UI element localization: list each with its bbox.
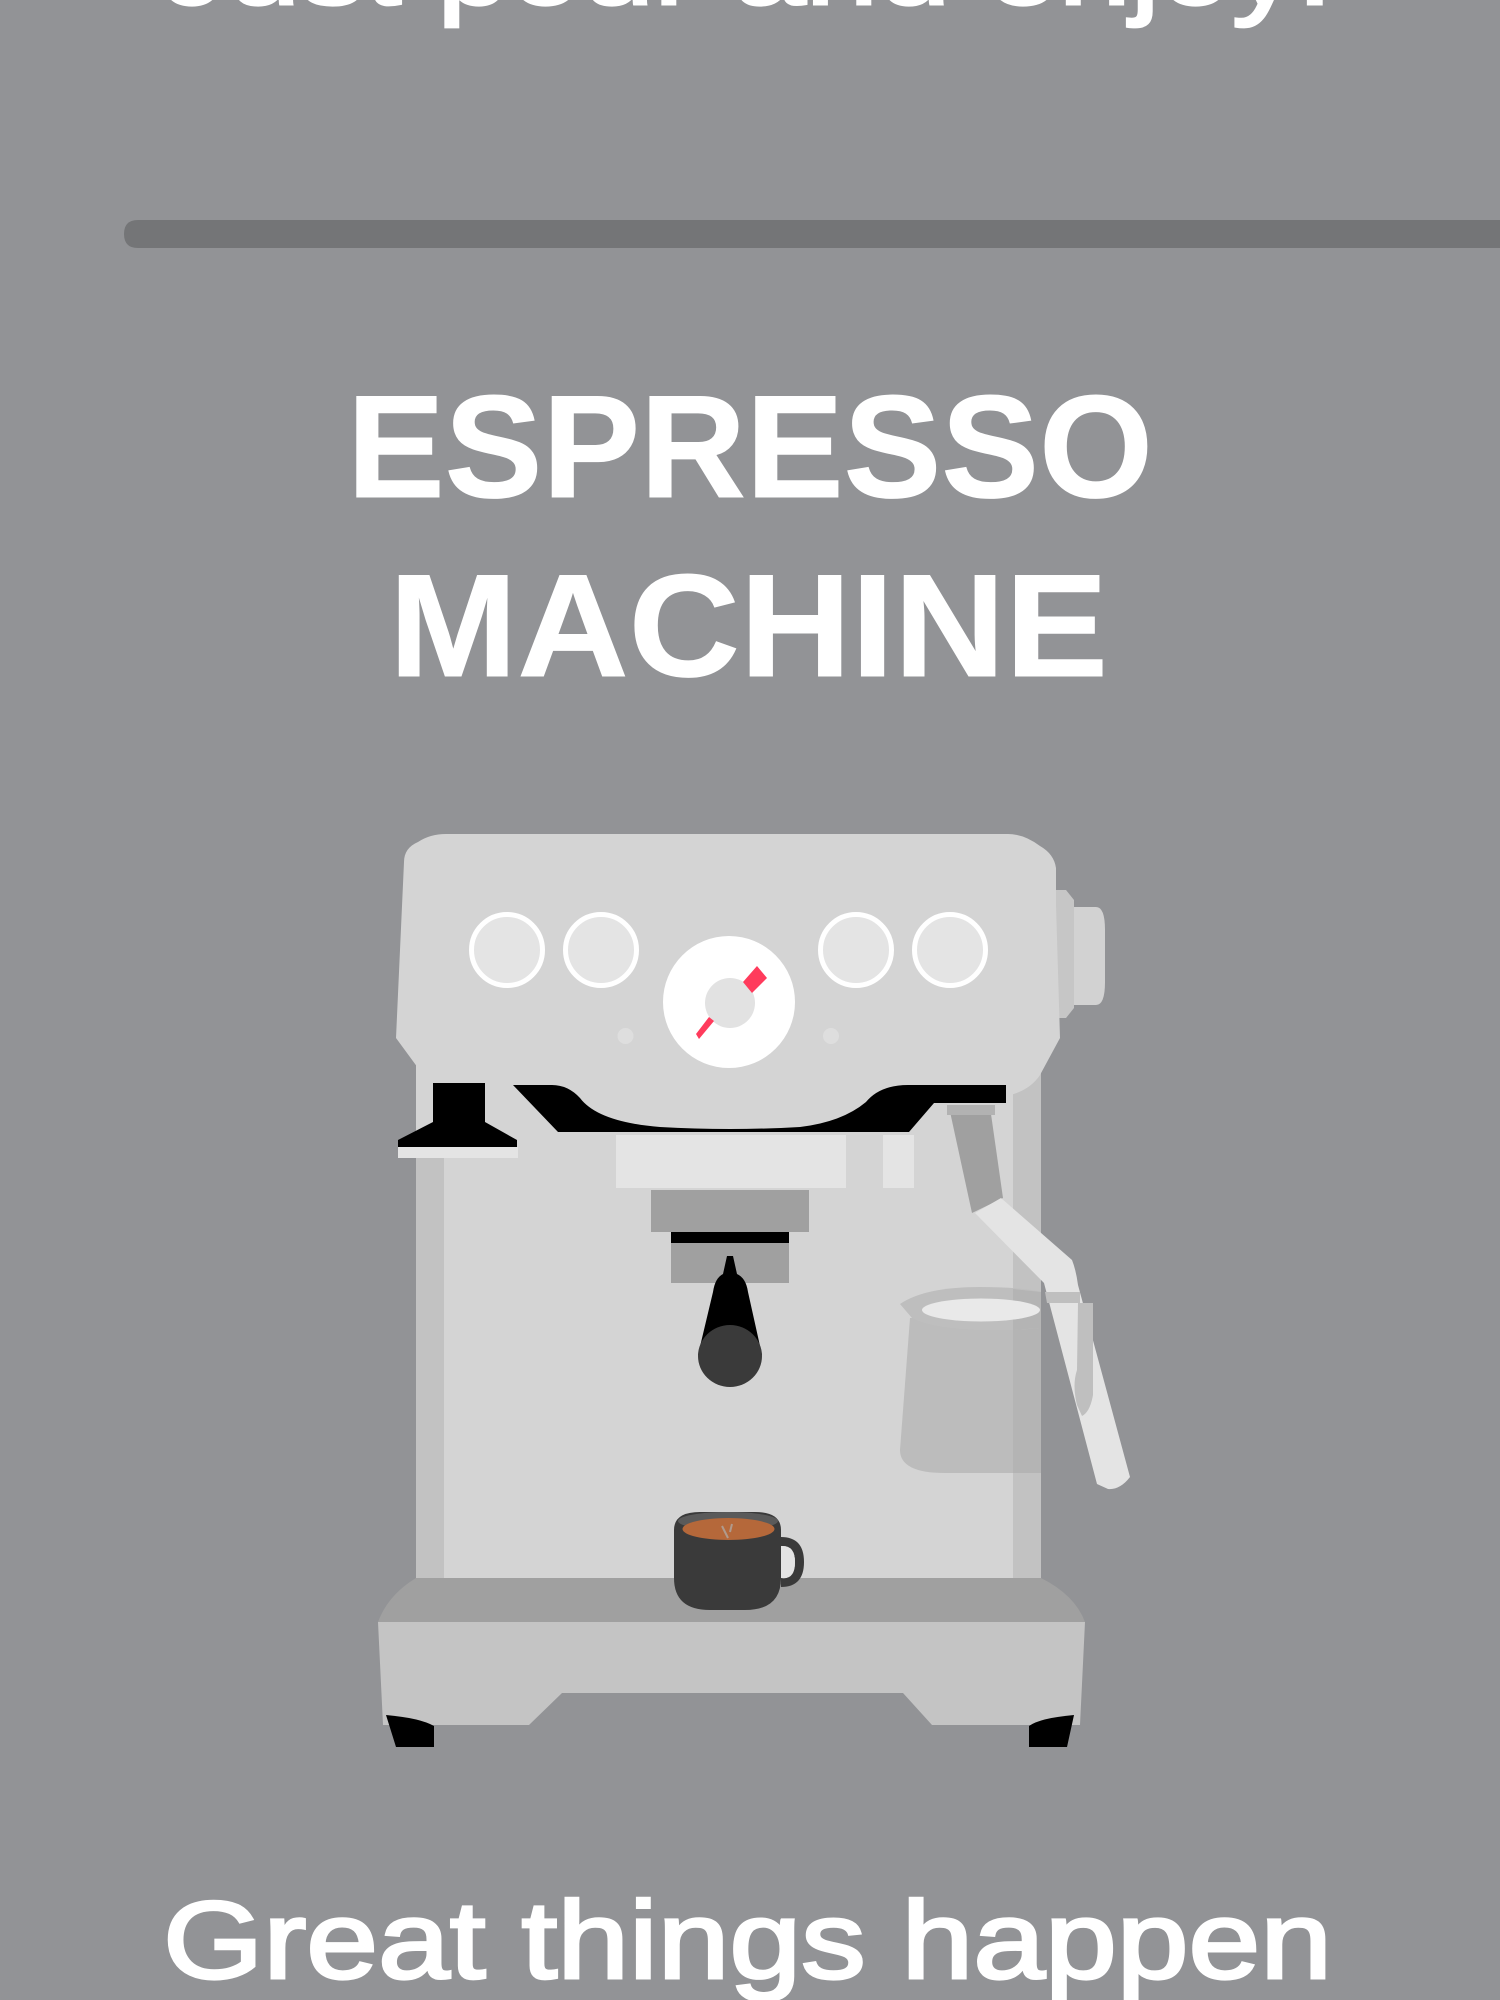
portafilter handle	[698, 1256, 762, 1387]
indicator lights	[472, 914, 986, 986]
illustration: espresso machine	[378, 834, 1130, 1747]
steam wand	[947, 1105, 1130, 1489]
drip tray	[378, 1578, 1085, 1725]
black head trim	[513, 1085, 1006, 1132]
pressure dial	[663, 936, 795, 1068]
steam knob on side	[1050, 890, 1105, 1018]
espresso cup	[674, 1512, 804, 1610]
group head	[651, 1190, 809, 1283]
machine body	[416, 1060, 1041, 1578]
heading: espresso machine: MACHINE	[389, 544, 1108, 707]
feet	[386, 1715, 1074, 1747]
small buttons	[618, 1028, 839, 1044]
water outlet blocks	[616, 1135, 914, 1188]
machine head panel	[396, 834, 1060, 1128]
text: espresso machine tagline: Great things happen	[163, 1879, 1332, 2000]
milk jug	[900, 1287, 1093, 1473]
heading: espresso machine	[347, 365, 1153, 707]
section divider bar	[124, 220, 1500, 248]
heading: espresso machine: ESPRESSO	[347, 365, 1153, 528]
left black bracket	[398, 1083, 518, 1158]
